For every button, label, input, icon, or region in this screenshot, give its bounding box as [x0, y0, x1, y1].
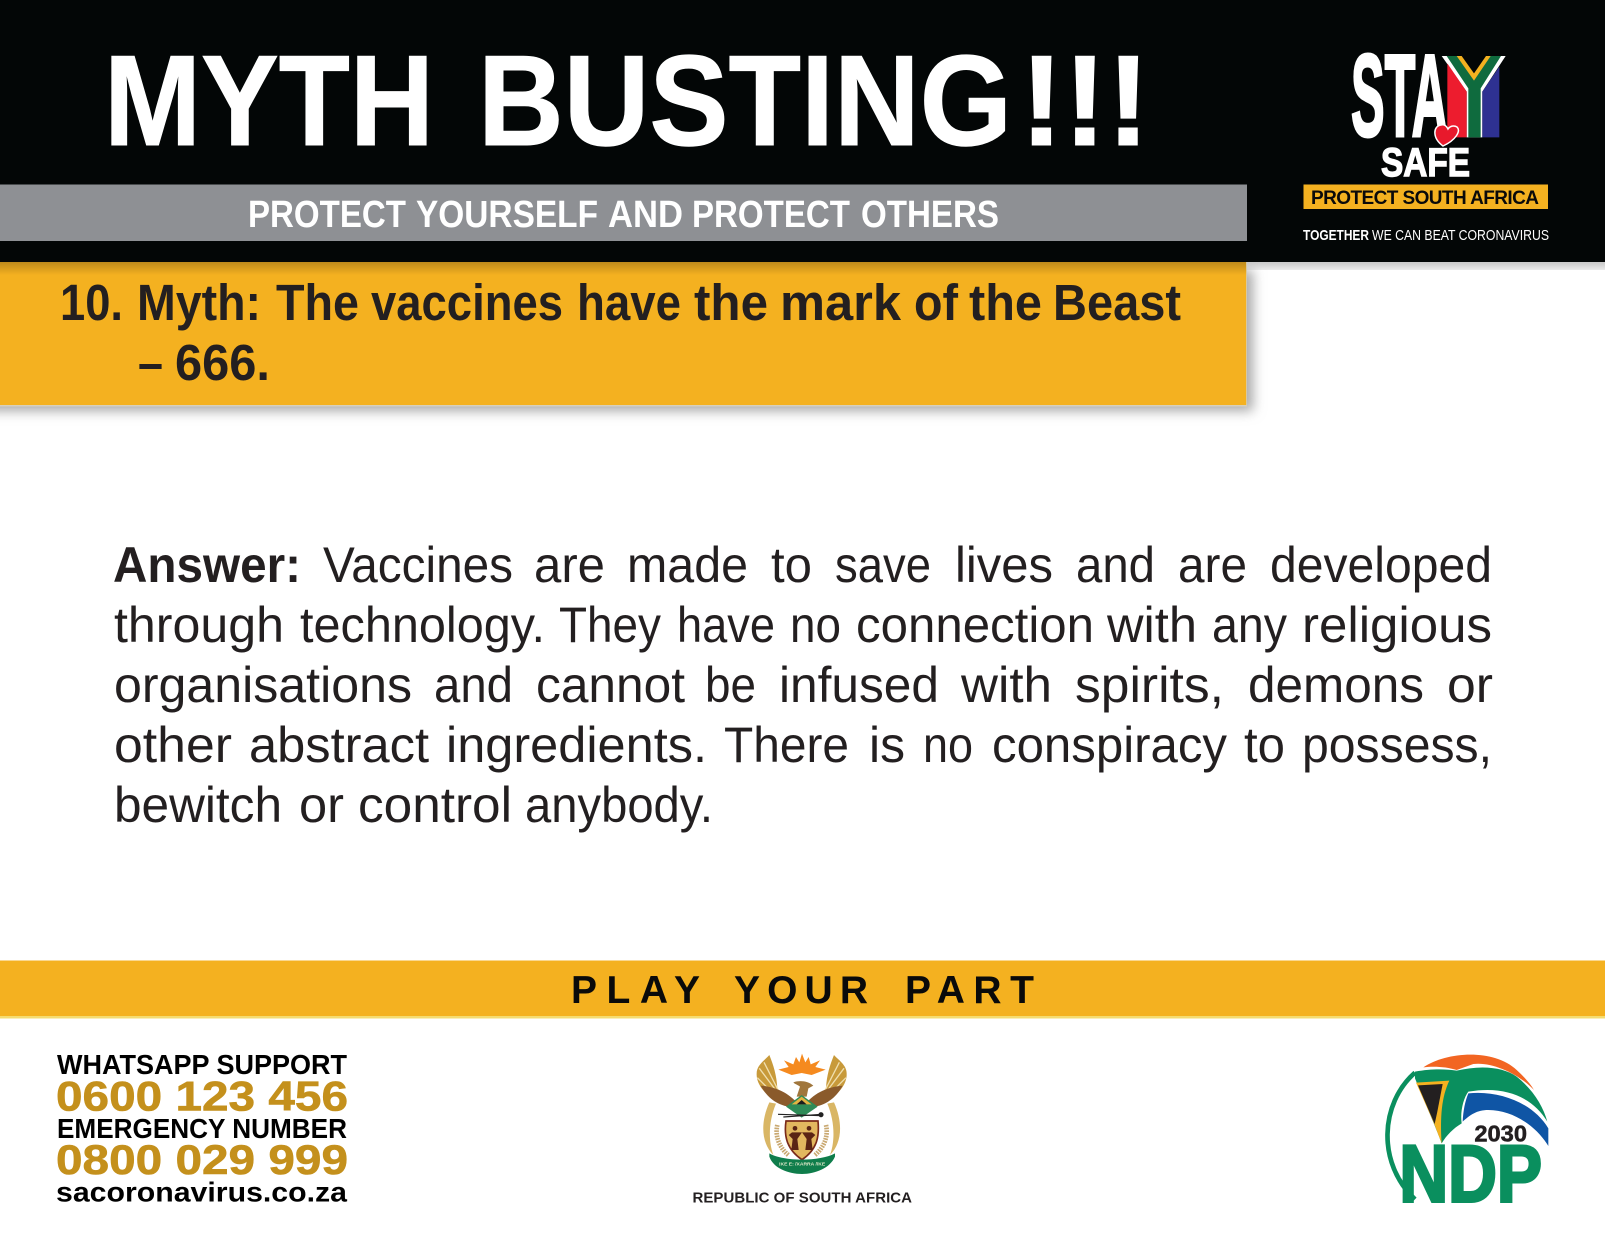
crest caption: REPUBLIC OF SOUTH AFRICA	[692, 1190, 912, 1206]
icon: heart	[1435, 125, 1458, 146]
panel: myth question shadow	[0, 270, 1253, 411]
panel: header band	[0, 0, 1605, 262]
band text: PLAY	[571, 969, 700, 1012]
header shadow	[1200, 254, 1605, 266]
answer text block: or	[1447, 657, 1493, 713]
contact details block: 0800 029 999	[56, 1136, 348, 1183]
answer text block: are	[534, 537, 605, 593]
NDP green ring	[1387, 1073, 1415, 1199]
icon: coat of arms	[757, 1054, 847, 1174]
title: MYTH	[104, 29, 434, 173]
answer text block: developed	[1270, 537, 1492, 593]
answer text block: save	[835, 537, 931, 593]
answer text block: There	[724, 717, 849, 773]
answer text block: anybody.	[525, 777, 713, 833]
band text: PART	[905, 969, 1034, 1012]
crest spears	[778, 1113, 823, 1117]
panel: play your part band	[0, 960, 1605, 1018]
myth headline text: mark	[780, 274, 902, 331]
myth headline text: 666.	[175, 334, 270, 391]
panel: grey subtitle bar	[0, 184, 1247, 241]
left half of the crest	[757, 1055, 797, 1155]
answer text block: lives	[955, 537, 1053, 593]
title: !!!	[1020, 29, 1150, 173]
myth headline text: Beast	[1053, 274, 1181, 331]
answer text block: conspiracy	[992, 717, 1227, 773]
logo strapline: WE CAN BEAT CORONAVIRUS	[1372, 227, 1549, 244]
NDP orange arc	[1423, 1055, 1534, 1090]
myth headline text	[60, 274, 1181, 391]
contact details block: 0600 123 456	[56, 1072, 348, 1120]
answer text block: ingredients.	[446, 717, 707, 773]
band text	[571, 969, 1034, 1012]
contact details block: EMERGENCY NUMBER	[57, 1113, 347, 1144]
logo strapline	[1303, 227, 1549, 244]
answer text block: possess,	[1302, 717, 1492, 773]
answer text block: other	[114, 717, 232, 773]
answer text block: to	[1244, 717, 1285, 773]
title: BUSTING	[478, 29, 1012, 173]
myth headline text: of	[914, 274, 959, 331]
answer text block: control	[358, 777, 512, 833]
answer text block: are	[1178, 537, 1247, 593]
answer text block: connection	[856, 597, 1094, 653]
subtitle text: PROTECT	[248, 194, 406, 236]
crest diamond	[786, 1095, 818, 1118]
myth headline text: the	[969, 274, 1042, 331]
contact details block: sacoronavirus.co.za	[56, 1176, 347, 1208]
logo: stay safe protect south africa: STA	[1351, 30, 1448, 161]
answer text block: religious	[1302, 597, 1492, 653]
answer text block: no	[790, 597, 841, 653]
logo word: SAFE: SAFE	[1381, 141, 1470, 185]
answer text block: spirits,	[1075, 657, 1224, 713]
myth headline text: the	[694, 274, 768, 331]
right half of the crest	[807, 1055, 847, 1155]
subtitle text	[248, 194, 999, 236]
myth headline text: The	[276, 274, 359, 331]
logo: stay safe protect south africa	[1303, 30, 1549, 244]
myth headline text: 10.	[60, 274, 123, 331]
answer text block: cannot	[536, 657, 685, 713]
band text: YOUR	[734, 969, 868, 1012]
NDP letters: NDP	[1399, 1130, 1542, 1220]
answer text block: and	[434, 657, 513, 713]
myth headline text: –	[138, 334, 163, 391]
answer text block: with	[960, 657, 1052, 713]
myth headline text: vaccines	[371, 274, 563, 331]
answer text block: bewitch	[114, 777, 282, 833]
crest shield	[785, 1121, 818, 1160]
answer text block: Vaccines	[323, 537, 513, 593]
answer text block: Answer:	[113, 537, 301, 593]
subtitle text: YOURSELF	[416, 194, 598, 236]
contact details block: WHATSAPP SUPPORT	[57, 1049, 347, 1080]
answer text block: through	[114, 597, 284, 653]
NDP black triangle	[1418, 1084, 1443, 1124]
NDP green flag shape	[1415, 1067, 1547, 1143]
answer text block: be	[705, 657, 756, 713]
myth headline text: have	[577, 274, 681, 331]
subtitle text: AND	[608, 194, 683, 236]
answer text block: made	[627, 537, 748, 593]
answer text block: to	[771, 537, 812, 593]
answer text block: or	[299, 777, 344, 833]
NDP blue stripe	[1463, 1093, 1548, 1146]
panel: myth question	[0, 262, 1247, 406]
answer text block: infused	[779, 657, 939, 713]
myth headline text: Myth:	[137, 274, 261, 331]
answer text block: have	[677, 597, 775, 653]
answer text block: demons	[1248, 657, 1424, 713]
crest ribbon: !KE E: /XARRA //KE	[779, 1162, 826, 1168]
crest sun	[778, 1054, 826, 1075]
crest bird	[793, 1081, 813, 1097]
title	[104, 29, 1150, 173]
answer text block: abstract	[249, 717, 429, 773]
logo strapline: TOGETHER	[1303, 227, 1369, 244]
answer text block: no	[923, 717, 973, 773]
logo: NDP 2030	[1387, 1055, 1548, 1220]
subtitle text: OTHERS	[861, 194, 999, 236]
answer text block: with	[1106, 597, 1197, 653]
answer text block: organisations	[114, 657, 412, 713]
answer text block	[113, 537, 1493, 833]
NDP yellow chevron	[1416, 1081, 1449, 1143]
answer text block: They	[559, 597, 661, 653]
answer text block: and	[1076, 537, 1155, 593]
subtitle text: PROTECT	[692, 194, 850, 236]
NDP 2030 label: 2030	[1474, 1121, 1527, 1147]
icon: south african flag letter Y	[1442, 56, 1506, 137]
answer text block: any	[1212, 597, 1287, 653]
answer text block: technology.	[300, 597, 545, 653]
answer text block: is	[869, 717, 905, 773]
contact details block	[56, 1049, 348, 1208]
logo tag: protect south africa: PROTECT SOUTH AFRICA	[1311, 188, 1539, 209]
